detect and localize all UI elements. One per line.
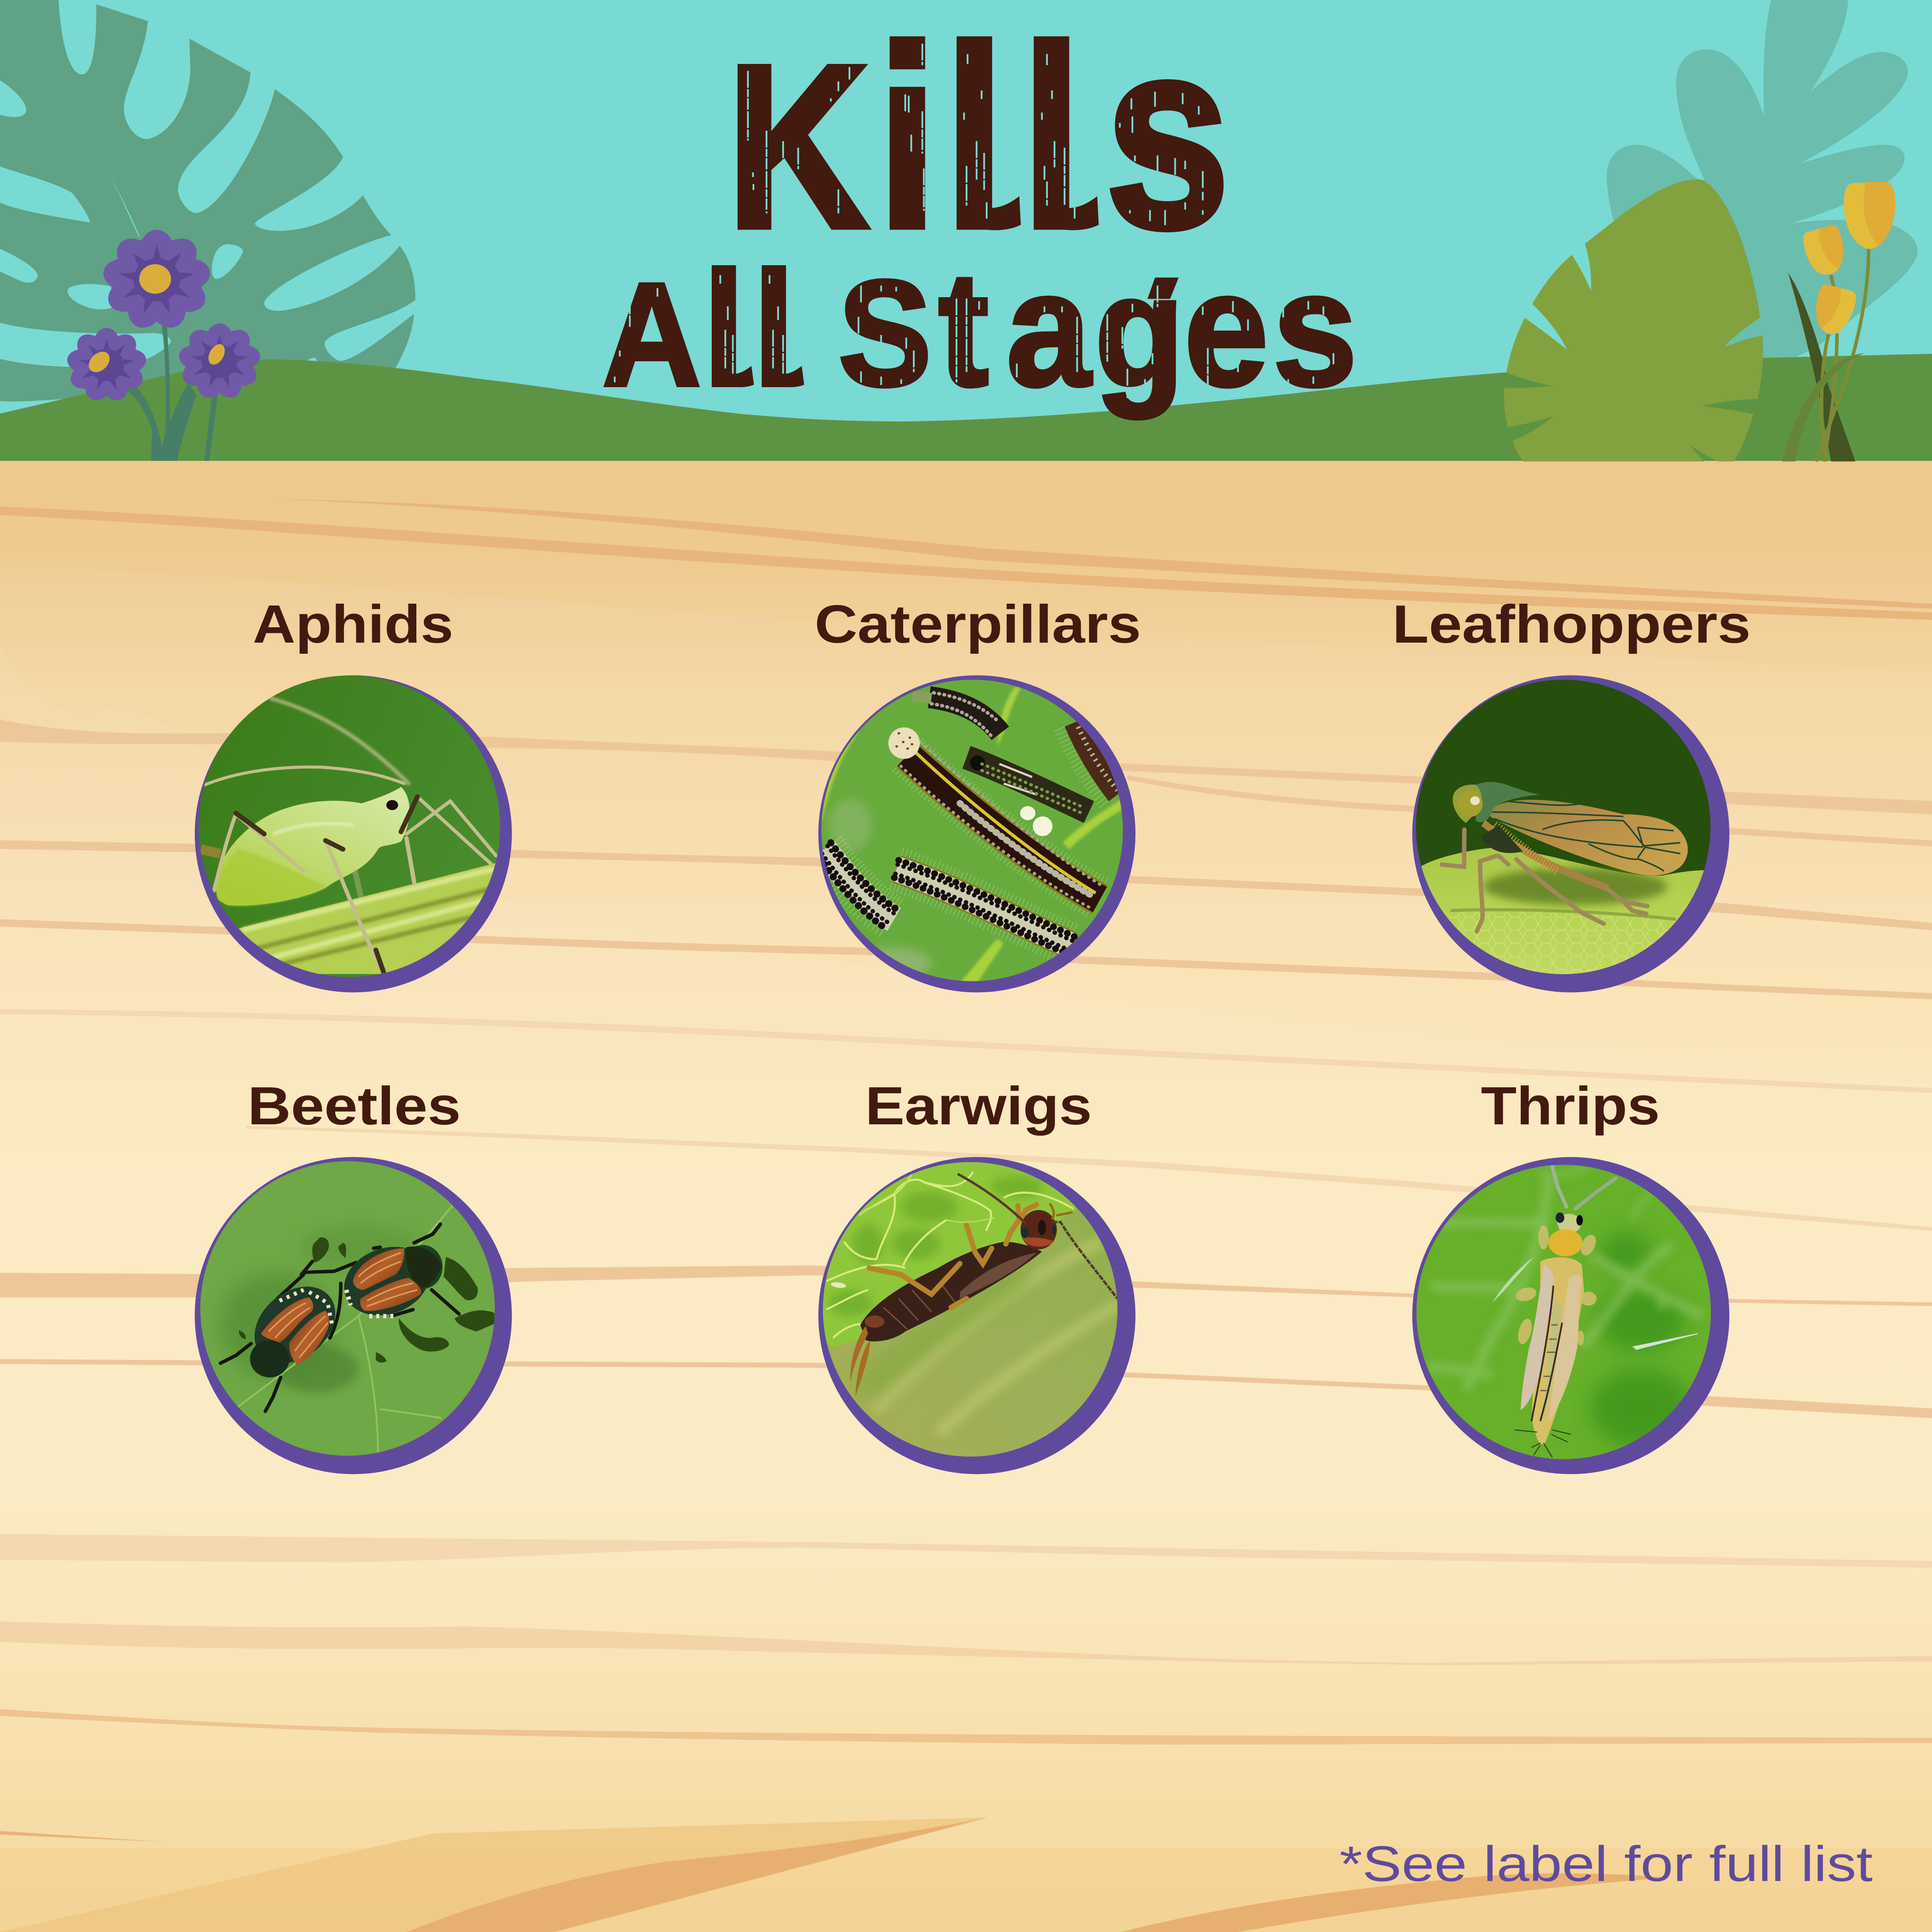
photo: beetles — [198, 1159, 501, 1460]
pest cell: Beetles — [195, 1076, 512, 1474]
label: Caterpillars: Caterpillars — [815, 594, 1141, 654]
curved blade — [1782, 353, 1865, 461]
title line: Kills: l — [1021, 0, 1082, 281]
wood background — [0, 461, 1932, 1932]
ring: leafhopper — [1412, 675, 1729, 992]
photo: aphid — [194, 672, 505, 983]
photo: caterpillars — [820, 679, 1126, 985]
tulip stems — [1816, 249, 1868, 461]
title line: Kills: l — [944, 0, 1005, 281]
flower left — [65, 328, 148, 404]
title line: All Stages: a — [1007, 238, 1092, 421]
title — [602, 0, 1357, 421]
green hill — [0, 354, 1932, 461]
title line: All Stages: s — [1273, 238, 1357, 421]
title line: All Stages: e — [1184, 238, 1269, 421]
pest cell: Earwigs — [818, 1076, 1135, 1474]
background plant right — [1607, 0, 1918, 377]
ring: aphid — [195, 675, 512, 992]
footnote: *See label for full list — [1339, 1836, 1873, 1892]
label: Leafhoppers: Leafhoppers — [1392, 594, 1751, 654]
ring: caterpillars — [818, 675, 1135, 992]
title line: All Stages: g — [1095, 242, 1184, 420]
title line: All Stages: t — [938, 238, 989, 421]
title line: All Stages: l — [703, 238, 745, 421]
title line: All Stages: l — [753, 238, 795, 421]
title letter hooks and distress marks — [615, 44, 1333, 398]
tulip lower — [1816, 284, 1856, 334]
caterpillar hairs — [824, 722, 1117, 945]
olive leaf and tulips — [1504, 179, 1895, 461]
title line: All Stages: A — [602, 252, 701, 416]
title line: All Stages: S — [838, 249, 932, 417]
monstera leaf — [0, 0, 415, 422]
ring: earwig — [818, 1157, 1135, 1474]
title line: Kills: K — [727, 18, 867, 275]
photo: leafhopper — [1413, 676, 1715, 985]
pest cell: Thrips — [1412, 1076, 1729, 1474]
flower stems — [127, 324, 218, 461]
pest cell: Caterpillars — [815, 594, 1141, 992]
purple flowers — [65, 230, 262, 461]
ring: thrips — [1412, 1157, 1729, 1474]
label: Earwigs: Earwigs — [865, 1076, 1092, 1136]
title line: Kills: i — [878, 0, 937, 281]
pest cell: Leafhoppers — [1392, 594, 1751, 992]
tulip middle — [1803, 225, 1843, 274]
label: Beetles: Beetles — [248, 1076, 461, 1136]
flower right — [177, 323, 262, 402]
dark grass blade — [1788, 273, 1855, 461]
photo: thrips — [1413, 1161, 1715, 1467]
tulip top — [1843, 182, 1895, 249]
pest cell: Aphids — [194, 594, 512, 992]
label: Aphids: Aphids — [253, 594, 453, 654]
header scene — [0, 0, 1932, 461]
photo: earwig — [820, 1159, 1122, 1460]
ring: beetle — [195, 1157, 512, 1474]
label: Thrips: Thrips — [1481, 1076, 1660, 1136]
olive leaf — [1504, 179, 1763, 461]
flower large — [100, 230, 213, 333]
